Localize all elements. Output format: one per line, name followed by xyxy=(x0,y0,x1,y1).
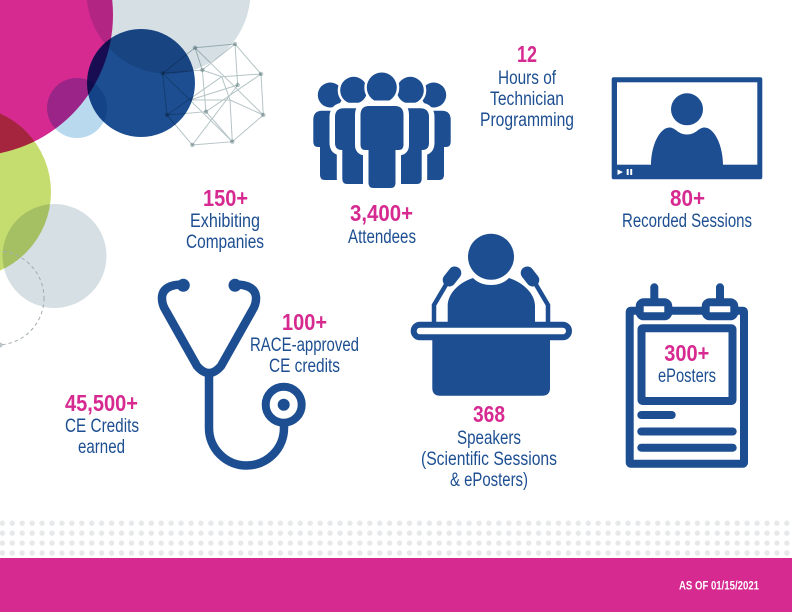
stat: 368 speakers: (Scientific Sessions xyxy=(421,449,557,470)
icon: poster board with 300+ ePosters xyxy=(630,287,744,464)
stat: 45,500+ CE credits earned: earned xyxy=(78,437,125,458)
stat: 3,400+ attendees: Attendees xyxy=(348,227,416,248)
icon: speaker at podium xyxy=(414,234,569,396)
stat: 12 hours of technician programming: 12 xyxy=(517,41,537,67)
icon: crowd of attendees xyxy=(313,72,451,188)
stat: 80+ recorded sessions: 80+ xyxy=(670,185,705,211)
footer date note: AS OF 01/15/2021 xyxy=(679,580,759,592)
stat: 100+ RACE-approved CE credits: CE credits xyxy=(269,356,340,377)
icon: poster board with 300+ ePosters: ePosters xyxy=(658,366,716,387)
stat: 150+ exhibiting companies: Exhibiting xyxy=(190,211,260,232)
stat: 150+ exhibiting companies: Companies xyxy=(186,232,264,253)
stat: 100+ RACE-approved CE credits: RACE-approved xyxy=(250,335,359,356)
stat: 368 speakers: 368 xyxy=(473,401,505,427)
stat: 45,500+ CE credits earned: CE Credits xyxy=(65,416,139,437)
stat: 368 speakers xyxy=(421,401,557,491)
stat: 3,400+ attendees: 3,400+ xyxy=(350,200,413,226)
icon: poster board with 300+ ePosters: 300+ xyxy=(664,340,709,366)
stat: 368 speakers: Speakers xyxy=(457,428,521,449)
stat: 45,500+ CE credits earned: 45,500+ xyxy=(65,390,138,416)
stat: 100+ RACE-approved CE credits xyxy=(250,309,359,377)
stat: 12 hours of technician programming: Technician xyxy=(490,89,564,110)
stat: 12 hours of technician programming xyxy=(480,41,574,131)
icon: stethoscope xyxy=(162,279,302,466)
stat: 100+ RACE-approved CE credits: 100+ xyxy=(282,309,327,335)
stat: 150+ exhibiting companies xyxy=(186,185,264,253)
stat: 80+ recorded sessions: Recorded Sessions xyxy=(622,211,752,232)
stat: 80+ recorded sessions xyxy=(622,185,752,232)
stat: 12 hours of technician programming: Hours of xyxy=(498,68,557,89)
stat: 3,400+ attendees xyxy=(348,200,416,248)
decorative overlapping circles xyxy=(0,0,265,348)
stat: 12 hours of technician programming: Programming xyxy=(480,110,574,131)
stat: 45,500+ CE credits earned xyxy=(65,390,139,458)
icon: video player with presenter xyxy=(612,77,762,179)
footer band xyxy=(0,558,792,612)
stat: 368 speakers: & ePosters) xyxy=(450,470,528,491)
stat: 150+ exhibiting companies: 150+ xyxy=(203,185,248,211)
